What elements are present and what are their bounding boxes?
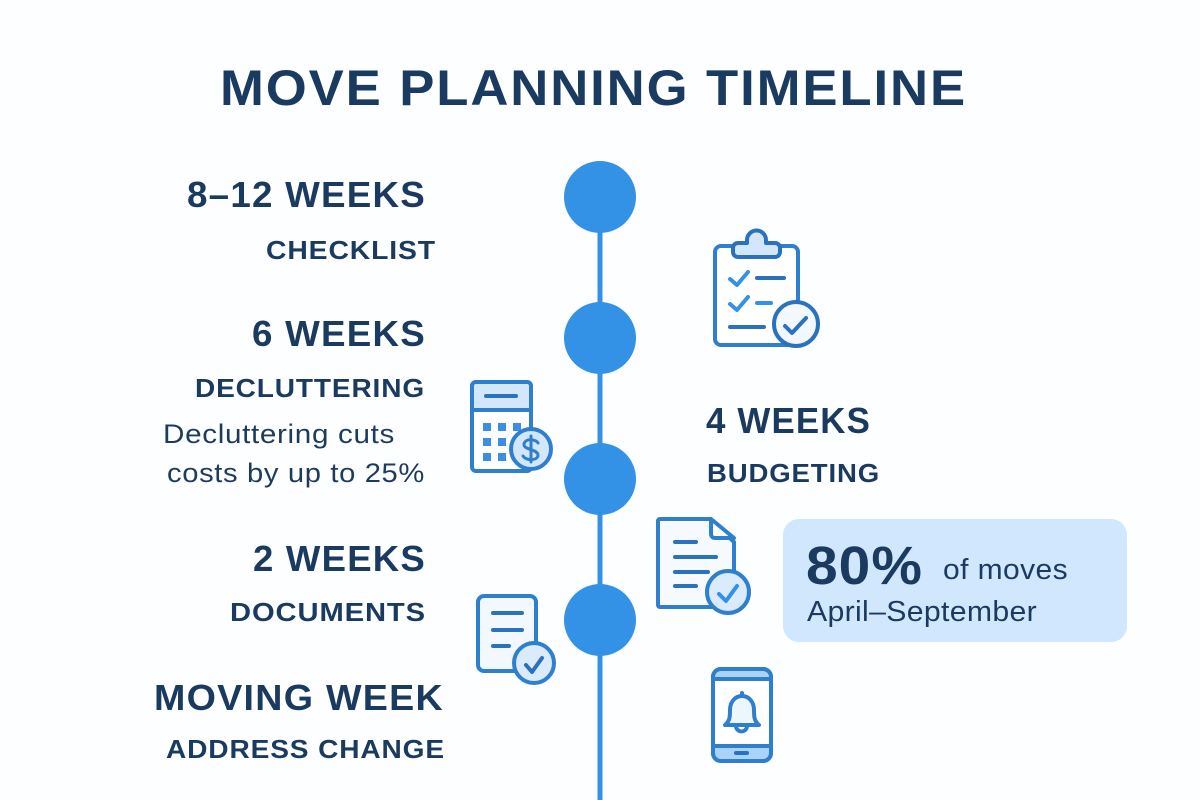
step: 8-12 weeks	[187, 174, 436, 265]
callout: 80% of moves: of moves	[943, 554, 1068, 586]
marker: 6 weeks	[564, 302, 636, 374]
step: 6 weeks: 6 WEEKS	[252, 313, 426, 354]
callout: 80% of moves: 80%	[806, 536, 923, 596]
step: moving week	[154, 677, 445, 764]
marker: 2 weeks	[564, 584, 636, 656]
step: 8-12 weeks: 8–12 WEEKS	[187, 174, 426, 215]
title: MOVE PLANNING TIMELINE	[220, 60, 967, 116]
step: 8-12 weeks: CHECKLIST	[266, 235, 436, 265]
step: 6 weeks: DECLUTTERING	[195, 373, 425, 403]
callout: 80% of moves	[783, 519, 1127, 642]
step: 4 weeks: BUDGETING	[707, 458, 880, 488]
step: 2 weeks: DOCUMENTS	[230, 597, 426, 627]
note: decluttering savings: costs by up to 25%	[167, 458, 425, 488]
note: decluttering savings	[163, 419, 425, 488]
timeline	[564, 161, 636, 800]
step: moving week: MOVING WEEK	[154, 677, 444, 718]
icon: small document with check	[478, 596, 554, 683]
step: 4 weeks	[706, 400, 880, 488]
step: 4 weeks: 4 WEEKS	[706, 400, 871, 441]
step: 6 weeks	[195, 313, 426, 403]
callout: 80% of moves: April–September	[807, 596, 1037, 628]
step: 2 weeks	[230, 538, 426, 627]
step: moving week: ADDRESS CHANGE	[166, 734, 445, 764]
step: 2 weeks: 2 WEEKS	[253, 538, 426, 579]
icon: calculator with dollar coin	[472, 382, 551, 471]
marker: 8-12 weeks	[564, 161, 636, 233]
note: decluttering savings: Decluttering cuts	[163, 419, 395, 449]
icon: clipboard checklist	[715, 231, 818, 346]
icon: phone with bell	[713, 669, 771, 761]
marker: 4 weeks	[564, 443, 636, 515]
icon: document with check	[658, 519, 749, 613]
